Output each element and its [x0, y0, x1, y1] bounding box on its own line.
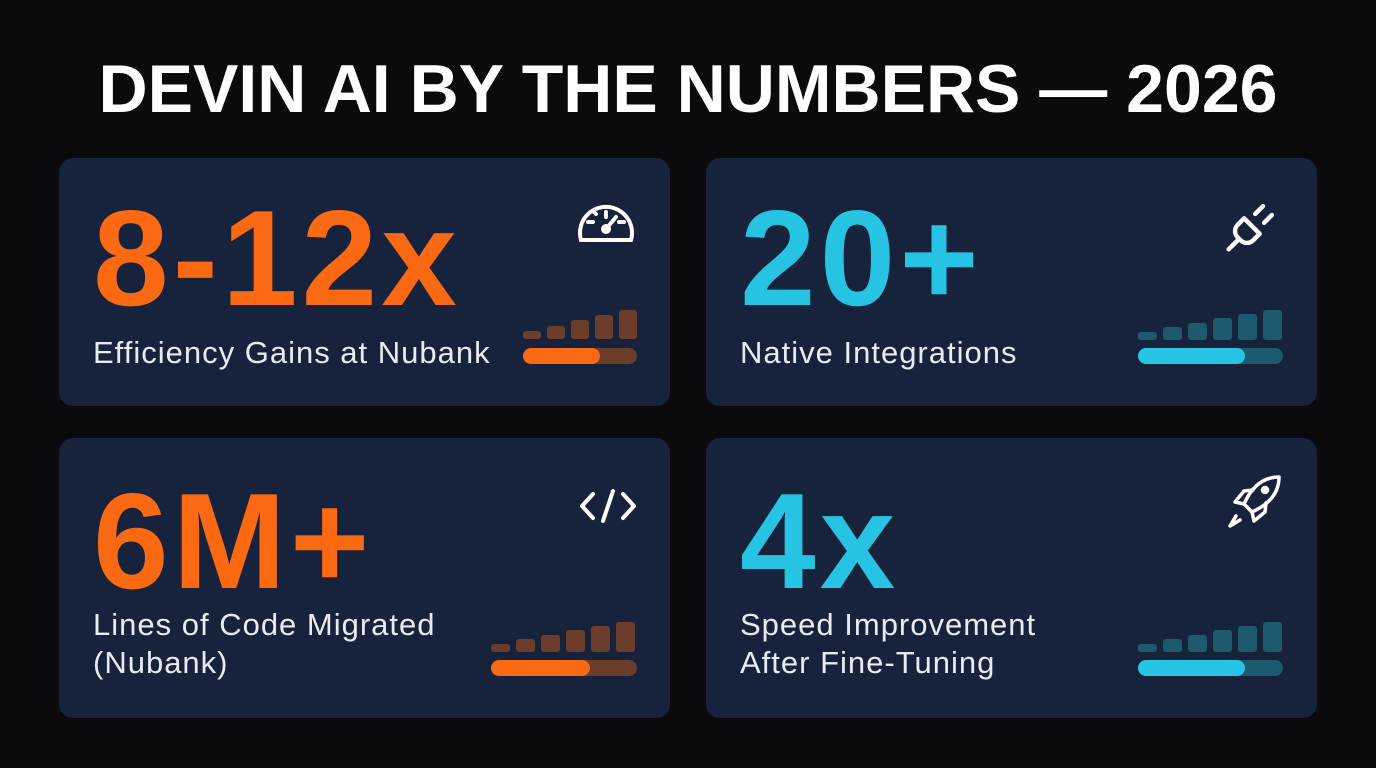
big number: 8-12x — [93, 182, 461, 334]
bar chart — [1138, 622, 1283, 676]
big number: 4x — [740, 465, 899, 617]
icon: plug — [1226, 204, 1274, 252]
label: After Fine-Tuning — [740, 645, 995, 680]
icon: speedometer — [578, 204, 634, 242]
panel: lines of code — [59, 438, 670, 718]
label: Lines of Code Migrated — [93, 607, 436, 642]
big number: 6M+ — [93, 465, 373, 617]
label: Speed Improvement — [740, 607, 1036, 642]
label: (Nubank) — [93, 645, 228, 680]
label — [93, 607, 436, 680]
label: Efficiency Gains at Nubank — [93, 335, 491, 370]
label — [740, 607, 1036, 680]
label: Native Integrations — [740, 335, 1017, 370]
panel: speed improvement — [706, 438, 1317, 718]
big number: 20+ — [740, 182, 983, 334]
icon: code — [580, 489, 636, 523]
panel: efficiency gains — [59, 158, 670, 406]
panel: native integrations — [706, 158, 1317, 406]
bar chart — [491, 622, 637, 676]
bar chart — [523, 310, 637, 364]
icon: rocket — [1228, 475, 1281, 528]
bar chart — [1138, 310, 1283, 364]
title: DEVIN AI BY THE NUMBERS — 2026 — [99, 51, 1277, 127]
